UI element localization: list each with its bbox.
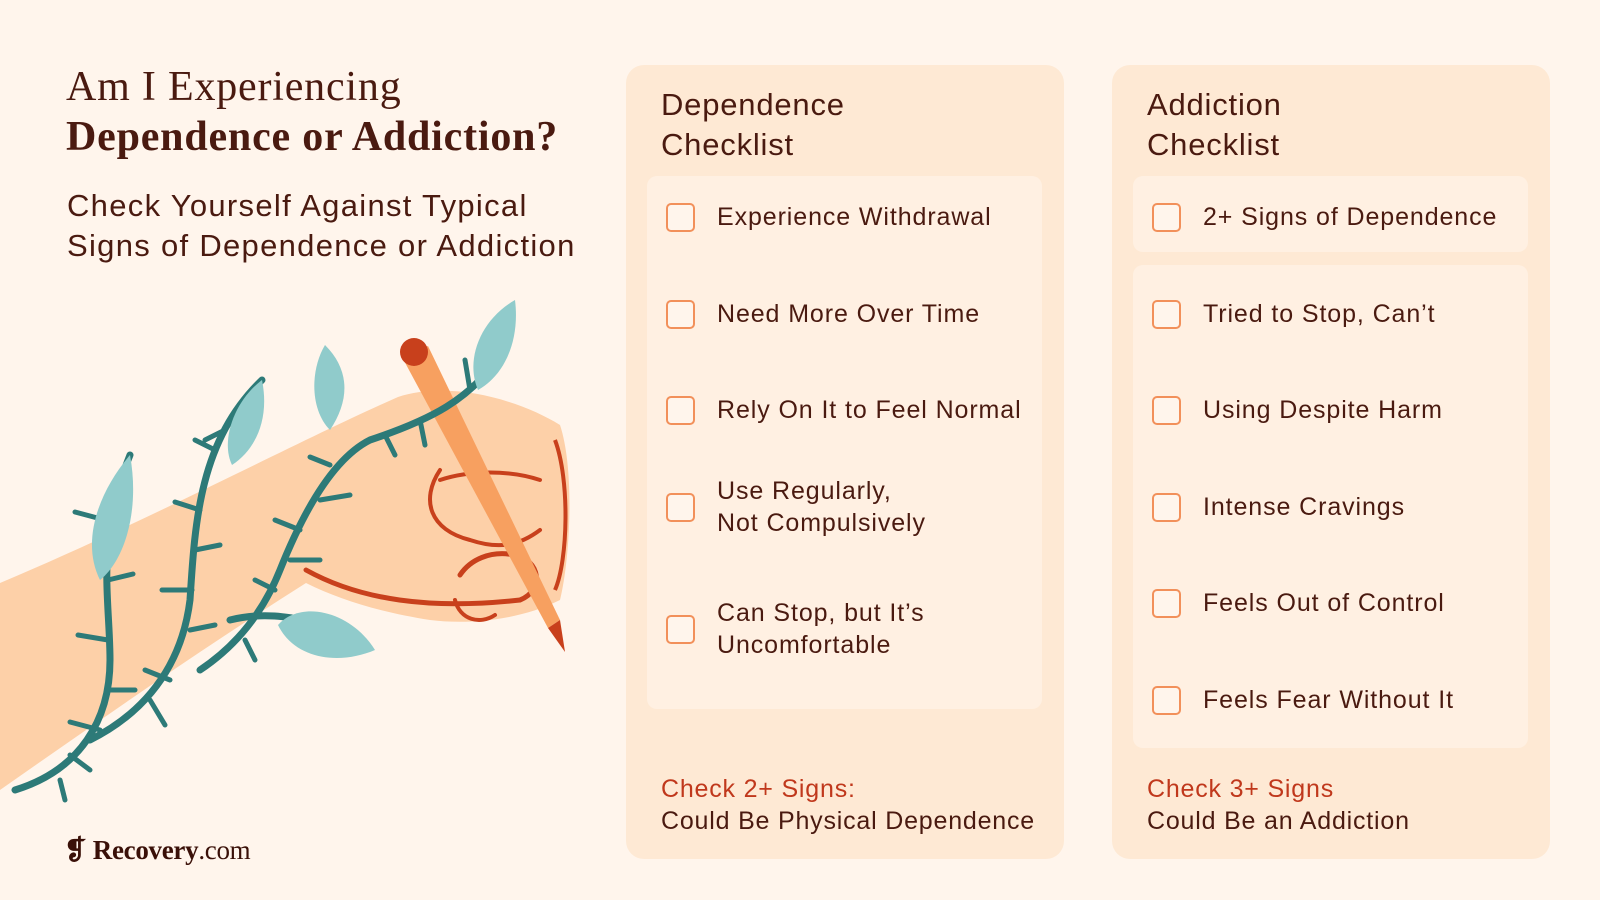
item 3: Rely On It to Feel Normal bbox=[717, 396, 1022, 424]
vines bbox=[15, 355, 500, 800]
heading: dependence bbox=[661, 87, 845, 162]
subtitle bbox=[67, 188, 576, 263]
heading: dependence: Checklist bbox=[661, 127, 794, 162]
footer: dependence result: Could Be Physical Dependence bbox=[661, 807, 1035, 835]
footer: addiction result: Check 3+ Signs bbox=[1147, 775, 1334, 803]
item a3: Intense Cravings bbox=[1203, 493, 1405, 521]
item a1: Tried to Stop, Can’t bbox=[1203, 300, 1435, 328]
item a2: Using Despite Harm bbox=[1203, 396, 1443, 424]
heading: addiction: Checklist bbox=[1147, 127, 1280, 162]
panel: dependence checklist bbox=[626, 65, 1064, 859]
panel: addiction checklist bbox=[1112, 65, 1550, 859]
footer: dependence result bbox=[661, 775, 1035, 835]
title: Dependence or Addiction? bbox=[66, 114, 558, 160]
pencil bbox=[400, 338, 565, 652]
title bbox=[66, 64, 558, 160]
footer: addiction result bbox=[1147, 775, 1410, 835]
item a4: Feels Out of Control bbox=[1203, 589, 1445, 617]
item 2: Need More Over Time bbox=[717, 300, 980, 328]
title: Am I Experiencing bbox=[66, 64, 402, 110]
heading: dependence: Dependence bbox=[661, 87, 845, 122]
dependence items box bbox=[647, 176, 1042, 709]
item a5: Feels Fear Without It bbox=[1203, 686, 1454, 714]
item 5 bbox=[666, 599, 925, 659]
footer: dependence result: Check 2+ Signs: bbox=[661, 775, 856, 803]
heading: addiction bbox=[1147, 87, 1282, 162]
illustration: hand with pencil and vines bbox=[0, 300, 570, 802]
leaves bbox=[92, 300, 516, 658]
addiction top box bbox=[1133, 176, 1528, 252]
arm and hand bbox=[0, 391, 569, 790]
heading: addiction: Addiction bbox=[1147, 87, 1282, 122]
subtitle: Check Yourself Against Typical bbox=[67, 188, 528, 223]
item 4: Use Regularly, bbox=[717, 477, 892, 505]
item 5: Can Stop, but It’s bbox=[717, 599, 925, 627]
item 5: Uncomfortable bbox=[717, 631, 891, 659]
subtitle: Signs of Dependence or Addiction bbox=[67, 228, 576, 263]
logo: ❡ Recovery.com bbox=[64, 835, 250, 865]
footer: addiction result: Could Be an Addiction bbox=[1147, 807, 1410, 835]
item: 2+ signs: 2+ Signs of Dependence bbox=[1203, 203, 1497, 231]
item 1: Experience Withdrawal bbox=[717, 203, 992, 231]
addiction items box bbox=[1133, 265, 1528, 748]
item 4 bbox=[666, 477, 926, 537]
item 4: Not Compulsively bbox=[717, 509, 926, 537]
